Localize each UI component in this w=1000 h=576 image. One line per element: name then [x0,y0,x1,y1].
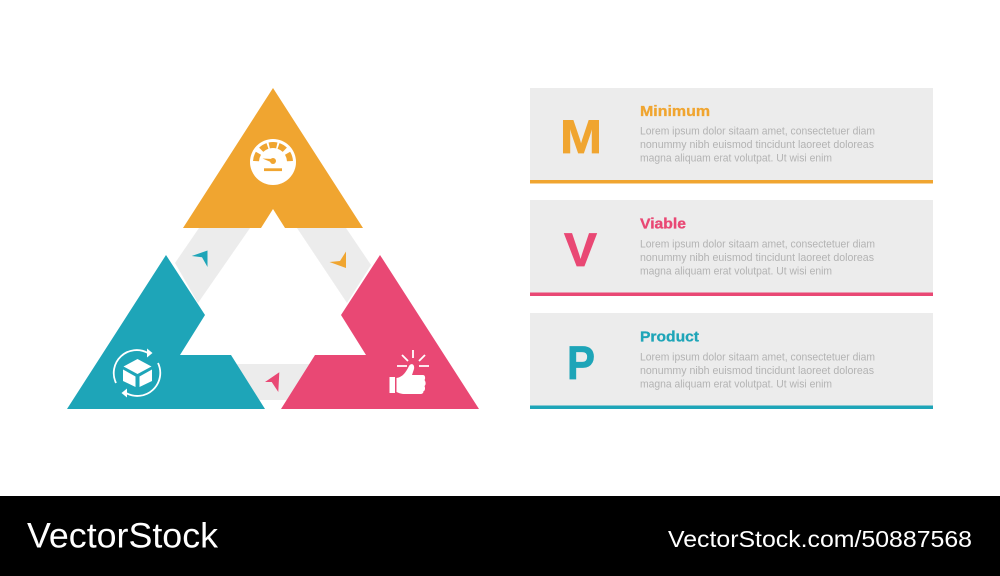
panel background [530,200,933,292]
arrow: pink [265,372,279,392]
body text [640,126,875,164]
heading: Product [640,330,699,346]
footer url: VectorStock.com/50887568 [668,526,972,552]
body text: Lorem ipsum dolor sitaam amet, consectetuer diam [640,126,875,138]
panel background [530,313,933,406]
teal triangle: product [67,255,265,409]
arrow: orange [330,252,346,268]
footer logo: VectorStock [27,517,219,556]
icon: thumbs up with sparkle [390,350,429,394]
body text: magna aliquam erat volutpat. Ut wisi enim [640,265,832,277]
heading: Minimum [640,104,710,120]
body text: magna aliquam erat volutpat. Ut wisi enim [640,152,832,164]
connector band: bottom [237,364,310,400]
body text: magna aliquam erat volutpat. Ut wisi enim [640,378,832,390]
orange triangle: minimum [183,88,363,228]
panel background [530,88,933,180]
body text: nonummy nibh euismod tincidunt laoreet doloreas [640,252,874,264]
heading: Viable [640,217,686,233]
body text: nonummy nibh euismod tincidunt laoreet doloreas [640,139,874,151]
arrow: teal [192,250,208,267]
pink triangle: viable [281,255,479,409]
body text: Lorem ipsum dolor sitaam amet, consectetuer diam [640,352,875,364]
body text [640,352,875,390]
accent bar [530,180,933,184]
accent bar [530,406,933,409]
icon: speedometer [250,139,296,185]
panel: product [530,313,933,409]
footer bar [0,496,1000,576]
letter V: V [564,223,598,276]
letter P: P [567,336,595,389]
body text: Lorem ipsum dolor sitaam amet, consectetuer diam [640,239,875,251]
panel: minimum [530,88,933,184]
connector band: right [297,228,371,303]
panel: viable [530,200,933,296]
letter M: M [560,110,602,163]
body text [640,239,875,277]
body text: nonummy nibh euismod tincidunt laoreet doloreas [640,365,874,377]
icon: box with rotating arrows [114,348,160,398]
accent bar [530,292,933,296]
triangle cycle diagram [67,88,479,409]
connector band: left [175,228,250,303]
